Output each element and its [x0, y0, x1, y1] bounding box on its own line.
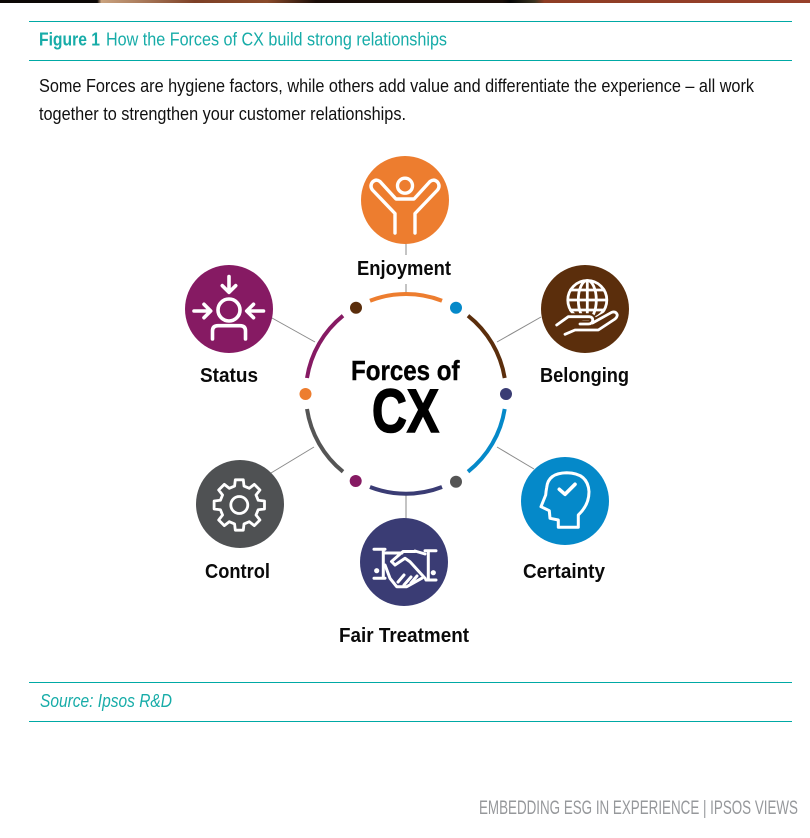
- label: enjoyment: Enjoyment: [357, 258, 451, 280]
- connector lines: [271, 243, 541, 519]
- icon: fair treatment: [360, 518, 448, 606]
- central ring: [300, 294, 512, 494]
- central title: Forces of: [351, 355, 460, 386]
- label: control: Control: [205, 561, 270, 583]
- intro text: [39, 75, 755, 124]
- central title: CX: [372, 377, 439, 445]
- icon: belonging: [541, 265, 629, 353]
- source bar: Source: Ipsos R&D: [40, 691, 172, 711]
- label: fair treatment: Fair Treatment: [339, 625, 469, 647]
- icon: certainty: [521, 457, 609, 545]
- label: belonging: Belonging: [540, 365, 629, 387]
- figure title bar: Figure 1: [39, 30, 100, 50]
- figure title bar: How the Forces of CX build strong relationships: [106, 30, 447, 50]
- label: status: Status: [200, 365, 258, 387]
- icon: control: [196, 460, 284, 548]
- icon: enjoyment: [361, 156, 449, 244]
- header photo strip: [0, 0, 810, 3]
- label: certainty: Certainty: [523, 561, 606, 583]
- figure title bar: [29, 22, 792, 60]
- central title: [351, 355, 460, 445]
- icon: status: [185, 265, 273, 353]
- intro text: together to strengthen your customer relationships.: [39, 103, 406, 124]
